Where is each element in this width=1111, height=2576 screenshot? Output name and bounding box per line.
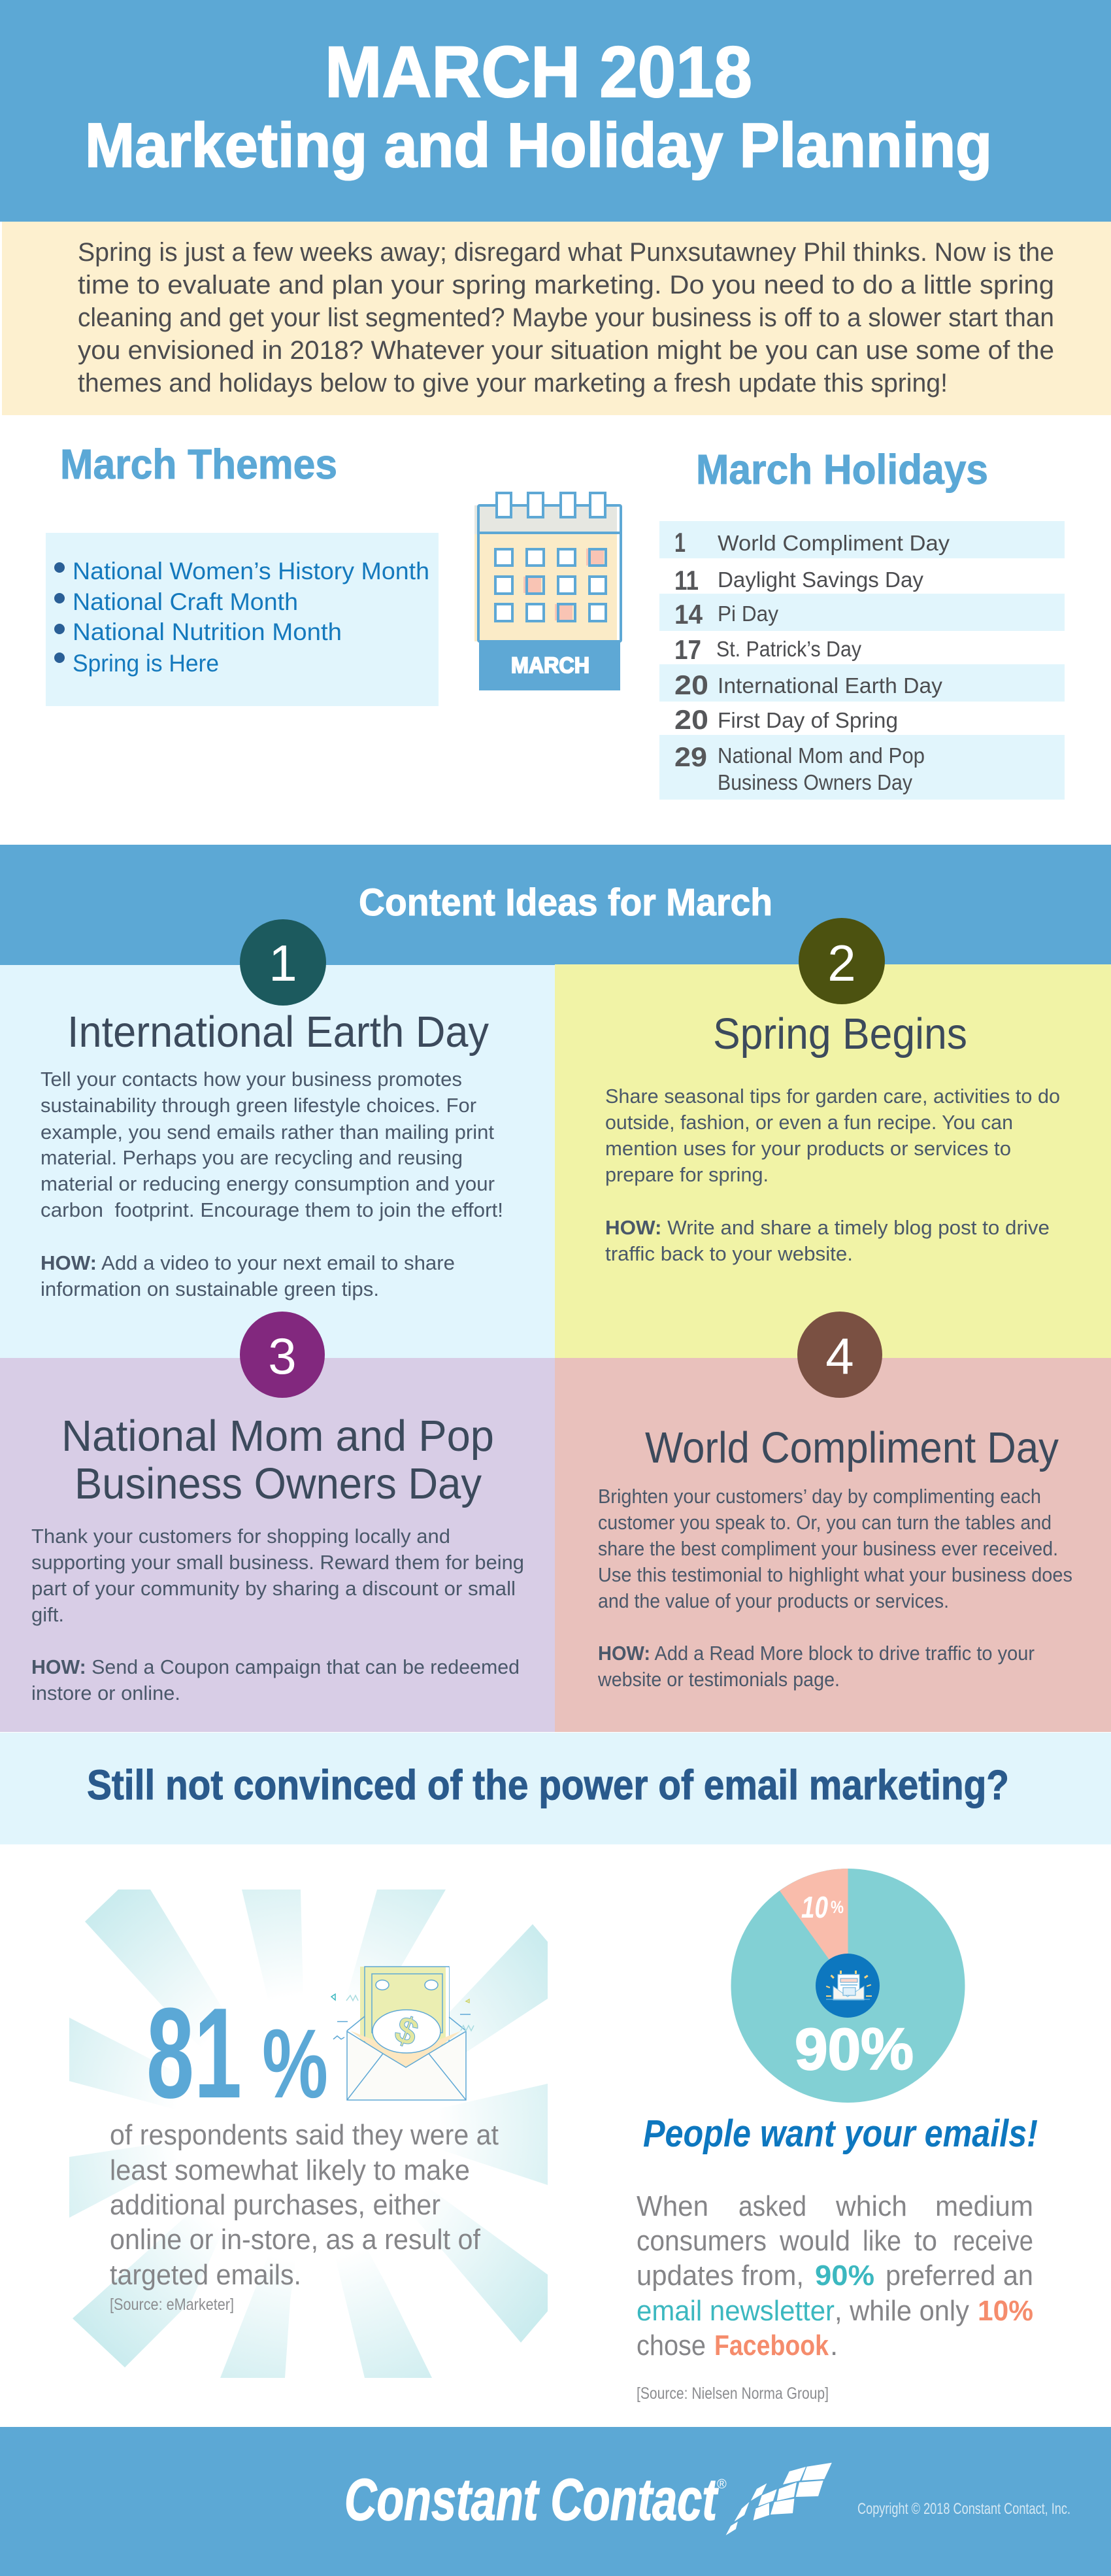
text block: 90 percent description: When — [637, 2190, 708, 2222]
panel: themes list: National Women’s History Month — [73, 558, 429, 585]
panel: World Compliment Day: Use this testimonial to highlight what your business does — [598, 1563, 1072, 1586]
panel: International Earth Day: example, you send emails rather than mailing print — [41, 1121, 494, 1144]
text block: 90 percent description: preferred an — [886, 2260, 1033, 2292]
icon: calendar — [474, 493, 621, 690]
panel: holidays list: 17 — [674, 634, 701, 665]
intro panel: you envisioned in 2018? Whatever your situation might be you can use some of the — [78, 336, 1054, 365]
panel: themes list — [46, 533, 439, 706]
panel: Spring Begins: prepare for spring. — [605, 1163, 769, 1186]
icon: envelope with money — [331, 1967, 474, 2100]
text block: 90 percent description: 10% — [978, 2295, 1033, 2327]
section band: Content Ideas for March: Content Ideas for March — [359, 881, 772, 924]
text block: 81 percent description: of respondents said they were at — [110, 2119, 499, 2151]
panel: International Earth Day: carbon footprint. Encourage them to join the effort! — [41, 1198, 503, 1221]
panel: International Earth Day: information on sustainable green tips. — [41, 1278, 379, 1300]
panel: holidays list: 11 — [674, 565, 699, 596]
panel: holidays list: 14 — [674, 599, 703, 630]
panel: National Mom and Pop Business Owners Day: supporting your small business. Reward them for being — [31, 1551, 524, 1574]
pie chart: 90 percent vs 10 percent: 90% — [795, 2017, 914, 2082]
panel: International Earth Day: Tell your contacts how your business promotes — [41, 1068, 462, 1091]
panel: International Earth Day: material or reducing energy consumption and your — [41, 1172, 495, 1195]
panel: World Compliment Day: website or testimonials page. — [597, 1668, 840, 1691]
text block: 90 percent description: would — [779, 2225, 850, 2257]
heading: March Themes: March Themes — [60, 441, 337, 488]
panel: National Mom and Pop Business Owners Day: Business Owners Day — [75, 1459, 482, 1508]
number badge 2 — [799, 918, 885, 1004]
text block: 90 percent description: chose — [637, 2330, 706, 2362]
panel: Spring Begins: traffic back to your website. — [605, 1242, 853, 1265]
pie chart: 90 percent vs 10 percent — [731, 1869, 965, 2103]
text block: 90 percent description: consumers — [637, 2225, 767, 2257]
stat: 81 percent: 81 — [146, 1981, 242, 2125]
panel: themes list: Spring is Here — [73, 650, 219, 677]
panel: International Earth Day: HOW: Add a video to your next email to share — [41, 1251, 455, 1274]
panel: World Compliment Day: Brighten your customers’ day by complimenting each — [598, 1485, 1041, 1508]
icon: calendar: MARCH — [511, 653, 589, 678]
panel: themes list: National Craft Month — [73, 588, 298, 615]
title line 2: Marketing and Holiday Planning — [85, 110, 992, 180]
icon: Constant Contact flag — [726, 2463, 832, 2535]
panel: National Mom and Pop Business Owners Day: part of your community by sharing a discount or small — [31, 1577, 516, 1600]
panel: International Earth Day: International Earth Day — [67, 1008, 489, 1057]
text block: 90 percent description: like — [863, 2225, 901, 2257]
panel: holidays list: National Mom and Pop — [718, 743, 925, 768]
panel: National Mom and Pop Business Owners Day: gift. — [31, 1603, 64, 1626]
panel: World Compliment Day: and the value of your products or services. — [598, 1589, 949, 1612]
panel: National Mom and Pop Business Owners Day: Thank your customers for shopping locally and — [31, 1525, 450, 1548]
text block: 90 percent description: which — [835, 2190, 907, 2222]
text block: 90 percent description — [637, 2190, 1033, 2362]
text block: 81 percent description: least somewhat likely to make — [110, 2154, 470, 2186]
text block: 81 percent description: online or in-store, as a result of — [110, 2224, 481, 2256]
footer band — [0, 2427, 1111, 2576]
panel: holidays list: Pi Day — [718, 602, 778, 626]
text block: 90 percent description: asked — [738, 2190, 806, 2222]
text block: 90 percent description: to — [914, 2225, 937, 2257]
panel: World Compliment Day: customer you speak to. Or, you can turn the tables and — [598, 1511, 1052, 1534]
panel: holidays list — [659, 521, 1065, 800]
panel: World Compliment Day: World Compliment Day — [645, 1423, 1059, 1472]
panel: Spring Begins: Spring Begins — [713, 1009, 967, 1059]
intro panel: themes and holidays below to give your marketing a fresh update this spring! — [78, 369, 948, 398]
icon: email in circle — [816, 1954, 880, 2018]
logo: Constant Contact: Constant Contact — [344, 2467, 719, 2533]
panel: holidays list: St. Patrick’s Day — [716, 637, 861, 661]
text block: 81 percent description: additional purchases, either — [110, 2189, 440, 2221]
panel: holidays list: 29 — [674, 741, 707, 772]
number badge 3 — [240, 1312, 325, 1398]
text block: 90 percent description: medium — [935, 2190, 1033, 2222]
panel: holidays list: 20 — [674, 669, 708, 700]
logo: Constant Contact: ® — [717, 2477, 727, 2492]
panel: World Compliment Day — [555, 1312, 1111, 1732]
panel: Spring Begins: Share seasonal tips for garden care, activities to do — [605, 1085, 1060, 1108]
text block: 81 percent description: targeted emails. — [110, 2259, 301, 2291]
heading: March Holidays: March Holidays — [696, 446, 988, 493]
text block: 90 percent description: . — [830, 2330, 838, 2362]
panel: holidays list: Daylight Savings Day — [718, 568, 923, 592]
panel: National Mom and Pop Business Owners Day: instore or online. — [31, 1682, 180, 1704]
pie chart: 90 percent vs 10 percent: 10 — [801, 1890, 828, 1924]
panel: Spring Begins: HOW: Write and share a timely blog post to drive — [605, 1216, 1050, 1239]
panel: National Mom and Pop Business Owners Day: HOW: Send a Coupon campaign that can be redeemed — [31, 1655, 520, 1678]
text block: 90 percent description: Facebook — [714, 2330, 829, 2362]
icon: envelope with money: $ — [390, 2007, 423, 2055]
text block: 81 percent description — [110, 2119, 499, 2314]
panel: holidays list: First Day of Spring — [718, 708, 898, 732]
sunburst background rays — [69, 1890, 548, 2378]
pie chart: 90 percent vs 10 percent: % — [831, 1897, 844, 1917]
panel: holidays list: World Compliment Day — [718, 531, 950, 555]
number badge 4 — [797, 1312, 882, 1398]
panel: Spring Begins — [555, 918, 1111, 1358]
panel: holidays list: 1 — [674, 527, 686, 558]
panel: International Earth Day: material. Perhaps you are recycling and reusing — [41, 1146, 463, 1169]
number badge 4: 4 — [825, 1327, 854, 1385]
section band: Content Ideas for March — [0, 845, 1111, 966]
text block: 90 percent description: 90% — [815, 2260, 874, 2292]
panel: International Earth Day: sustainability through green lifestyle choices. For — [41, 1094, 476, 1117]
text block: 90 percent description: updates from, — [637, 2260, 804, 2292]
number badge 2: 2 — [827, 934, 856, 992]
section band: email marketing question: Still not convinced of the power of email marketing? — [87, 1761, 1009, 1808]
text block: 90 percent description: email newsletter — [637, 2295, 835, 2327]
panel: themes list: National Nutrition Month — [73, 619, 342, 645]
text block: 90 percent description: receive — [953, 2225, 1033, 2257]
header banner — [0, 0, 1111, 222]
heading: People want your emails: People want your emails! — [643, 2112, 1038, 2155]
panel: National Mom and Pop Business Owners Day: National Mom and Pop — [61, 1412, 494, 1461]
panel: holidays list: Business Owners Day — [718, 770, 912, 794]
panel: Spring Begins: outside, fashion, or even a fun recipe. You can — [605, 1111, 1013, 1134]
number badge 1 — [240, 919, 326, 1006]
panel: holidays list: International Earth Day — [718, 673, 943, 698]
panel: World Compliment Day: HOW: Add a Read More block to drive traffic to your — [598, 1642, 1035, 1665]
intro panel: Spring is just a few weeks away; disregard what Punxsutawney Phil thinks. Now is the — [78, 238, 1054, 267]
number badge 1: 1 — [269, 934, 297, 992]
panel: National Mom and Pop Business Owners Day — [0, 1312, 555, 1732]
intro panel — [2, 222, 1111, 415]
panel: Spring Begins: mention uses for your products or services to — [605, 1137, 1011, 1160]
title line 1: MARCH 2018 — [325, 32, 752, 112]
stat: 81 percent: % — [262, 2008, 328, 2118]
panel: holidays list: 20 — [674, 704, 708, 735]
intro panel: cleaning and get your list segmented? Maybe your business is off to a slower start than — [78, 303, 1054, 332]
number badge 3: 3 — [268, 1327, 297, 1385]
section band: email marketing question — [0, 1733, 1111, 1844]
text block: 90 percent description: , while only — [835, 2295, 969, 2327]
intro panel: time to evaluate and plan your spring marketing. Do you need to do a little spring — [78, 271, 1054, 299]
panel: International Earth Day — [0, 919, 555, 1358]
panel: World Compliment Day: share the best compliment your business ever received. — [598, 1537, 1058, 1560]
text block: 81 percent description: [Source: eMarketer] — [110, 2296, 234, 2314]
source note: Nielsen Norma Group: [Source: Nielsen Norma Group] — [637, 2384, 829, 2403]
